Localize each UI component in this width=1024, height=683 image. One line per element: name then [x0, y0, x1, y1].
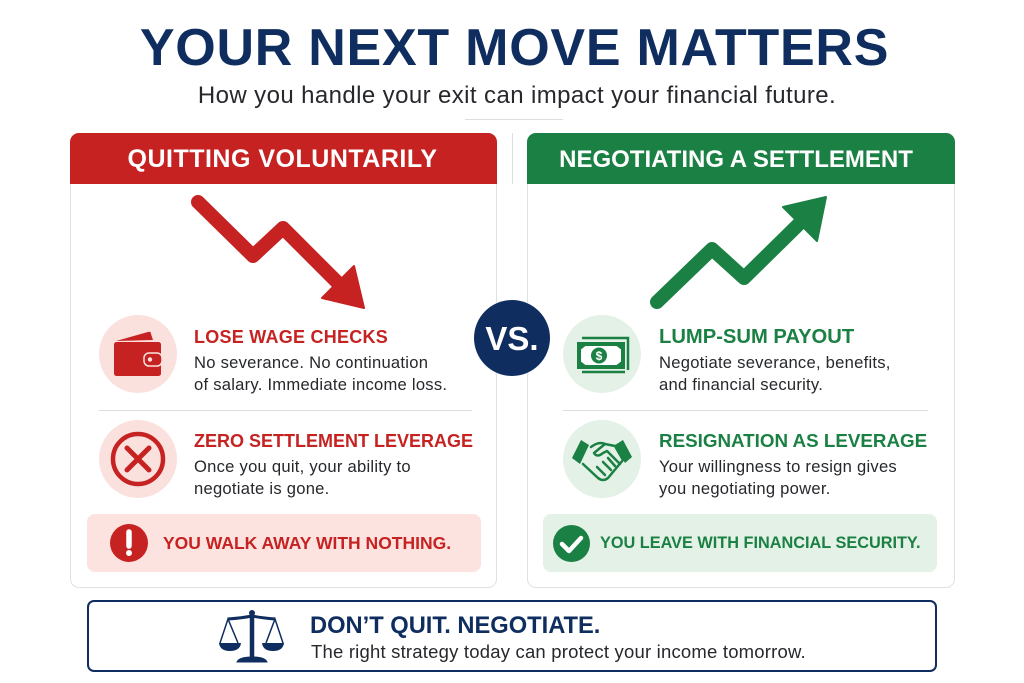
divider	[563, 410, 928, 411]
icon: banknotes: $	[596, 349, 603, 363]
icon: wallet	[99, 315, 177, 393]
text: zero settlement leverage: negotiate is gone.	[194, 479, 330, 498]
callout: walk away with nothing	[87, 514, 481, 572]
heading: lump-sum payout: LUMP-SUM PAYOUT	[659, 326, 854, 348]
icon: banknotes	[563, 315, 641, 393]
heading: lose wage checks: LOSE WAGE CHECKS	[194, 327, 388, 347]
text: zero settlement leverage	[194, 457, 411, 498]
panel heading: quitting voluntarily: QUITTING VOLUNTARILY	[128, 145, 438, 173]
text: lose wage checks: No severance. No continuation	[194, 353, 428, 372]
callout text: YOU LEAVE WITH FINANCIAL SECURITY.	[600, 534, 921, 552]
panel heading: negotiating a settlement: NEGOTIATING A SETTLEMENT	[559, 146, 913, 173]
text: resignation as leverage: Your willingness to resign gives	[659, 457, 897, 476]
icon: exclamation	[110, 524, 148, 562]
icon: check	[553, 525, 590, 562]
centre divider	[512, 133, 513, 184]
text: lump-sum payout: Negotiate severance, benefits,	[659, 353, 891, 372]
heading: zero settlement leverage: ZERO SETTLEMENT LEVERAGE	[194, 431, 473, 451]
callout: financial security	[543, 514, 937, 572]
panel heading: quitting voluntarily	[70, 133, 497, 184]
panel: quitting voluntarily	[70, 133, 497, 588]
panel heading: negotiating a settlement	[527, 133, 955, 184]
banner heading: DON’T QUIT. NEGOTIATE.	[310, 613, 600, 639]
title: YOUR NEXT MOVE MATTERS	[140, 19, 889, 77]
banner text: The right strategy today can protect your income tomorrow.	[311, 641, 806, 662]
banner: don't quit, negotiate	[87, 600, 937, 672]
text: resignation as leverage	[659, 457, 897, 498]
text: lose wage checks	[194, 353, 447, 394]
text: lump-sum payout	[659, 353, 891, 394]
text: resignation as leverage: you negotiating power.	[659, 479, 831, 498]
panel: negotiating a settlement	[527, 133, 955, 588]
text: zero settlement leverage: Once you quit, your ability to	[194, 457, 411, 476]
heading: resignation as leverage: RESIGNATION AS LEVERAGE	[659, 430, 927, 451]
divider under subtitle	[465, 119, 563, 120]
callout text: YOU WALK AWAY WITH NOTHING.	[163, 533, 451, 553]
icon: scales	[219, 610, 284, 662]
icon: circled x	[99, 420, 177, 498]
subtitle: How you handle your exit can impact your financial future.	[198, 82, 836, 109]
badge: vs	[474, 300, 550, 376]
badge: vs: VS.	[485, 320, 539, 357]
divider	[99, 410, 472, 411]
text: lose wage checks: of salary. Immediate income loss.	[194, 375, 447, 394]
icon: handshake	[563, 420, 641, 498]
text: lump-sum payout: and financial security.	[659, 375, 823, 394]
